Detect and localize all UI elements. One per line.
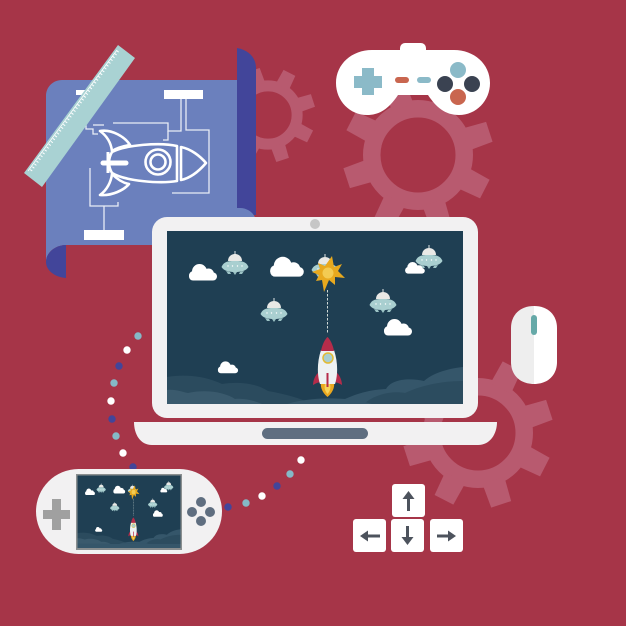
icon: game controller <box>336 43 490 115</box>
handheld buttons <box>187 497 215 526</box>
icon: blueprint bottom curl <box>46 245 66 278</box>
icon: ruler <box>24 45 135 187</box>
panel: blueprint sheet <box>46 48 256 278</box>
handheld console <box>36 469 222 554</box>
trackpad <box>262 428 368 439</box>
laptop lid <box>152 217 478 418</box>
icon: d-pad <box>43 499 70 530</box>
icon: upper left gear <box>221 68 315 162</box>
icon: lower right gear <box>403 358 553 508</box>
icon: mouse <box>511 306 557 384</box>
down key <box>391 519 424 552</box>
up key <box>392 484 425 517</box>
handheld screen <box>76 474 182 550</box>
right key <box>430 519 463 552</box>
icon: rocket schematic <box>100 131 206 195</box>
laptop camera <box>310 219 320 229</box>
laptop base <box>134 422 497 445</box>
blueprint callout labels <box>76 90 203 240</box>
laptop <box>134 217 497 445</box>
left key <box>353 519 386 552</box>
icon: large upper gear <box>343 80 493 230</box>
dotted path: laptop to handheld <box>107 332 305 511</box>
blueprint leader lines <box>86 99 209 230</box>
game screen <box>167 231 463 404</box>
arrow keys <box>353 484 463 552</box>
